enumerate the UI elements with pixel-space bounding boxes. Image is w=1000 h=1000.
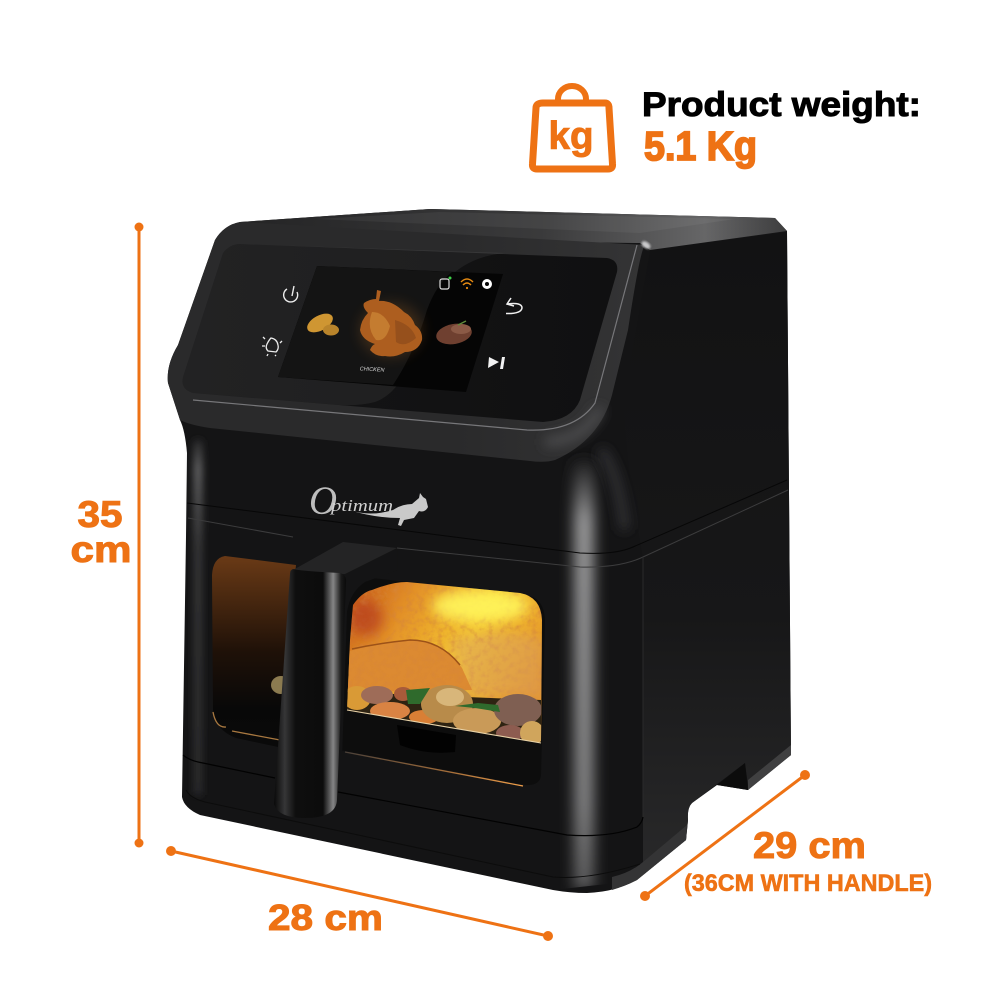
control panel glass [182, 244, 617, 422]
chicken leg [345, 640, 472, 692]
tray rim and door glow [345, 710, 541, 786]
height label: cm [70, 529, 132, 570]
panel reflection [182, 244, 505, 405]
shoulder glow arc [600, 450, 625, 530]
left window pane [212, 556, 296, 747]
leg shadow line [352, 640, 460, 665]
dimension line: depth [640, 770, 810, 901]
door handle [274, 542, 398, 818]
width label: 28 cm [268, 897, 383, 938]
handle cap [293, 542, 397, 574]
rear foot bevel [748, 745, 791, 790]
depth label: 29 cm [753, 825, 866, 866]
shoulder spark [640, 240, 652, 250]
head edge highlight [193, 245, 637, 430]
handle front [274, 569, 346, 818]
air fryer product [168, 209, 791, 893]
dimension line: width [166, 846, 553, 941]
brand logo: O [309, 478, 337, 523]
icon: back arrow [506, 298, 522, 314]
right highlight column [574, 460, 594, 890]
weight icon: kg bag: kg [548, 115, 594, 158]
icon: light bulb [262, 337, 282, 356]
golden highlight [432, 590, 528, 622]
left highlight column [194, 440, 202, 795]
right window dark frame [340, 575, 545, 785]
icon: power [284, 286, 298, 302]
body silhouette [168, 209, 791, 893]
left window potato [271, 676, 291, 694]
status icons [440, 276, 490, 289]
weight value: 5.1 Kg [644, 123, 757, 169]
screen steak [435, 321, 473, 347]
roast chicken in window [343, 578, 545, 748]
top surface [240, 209, 787, 250]
seam lines [183, 480, 788, 877]
dimension line: height [134, 222, 144, 848]
front foot bevel [612, 825, 687, 890]
tray under-shadow [397, 725, 456, 753]
rear foot notch [717, 763, 748, 790]
red browned thigh [349, 600, 383, 636]
head lower-right sheen [545, 408, 600, 442]
weight icon: kg bag [532, 86, 613, 169]
touch screen [278, 266, 503, 392]
potatoes and herbs [343, 685, 544, 745]
screen nuggets [304, 310, 339, 336]
right side face [623, 232, 791, 875]
depth note: (36CM WITH HANDLE) [684, 870, 932, 897]
icon: play next [488, 357, 505, 369]
kangaroo mark [349, 493, 428, 526]
pale lower breast [450, 632, 545, 700]
heading: product weight: Product weight: [642, 86, 921, 124]
brand logo [309, 478, 428, 526]
screen label: CHICKEN [360, 366, 385, 374]
left window bottom glow [213, 712, 280, 740]
height label: 35 [78, 494, 122, 535]
front highlights [194, 440, 625, 890]
handle neck [330, 548, 398, 760]
lid recess [315, 212, 735, 233]
brand logo: ptimum [330, 496, 393, 515]
screen chicken [359, 290, 423, 358]
height label [70, 494, 132, 570]
control head [168, 222, 645, 462]
